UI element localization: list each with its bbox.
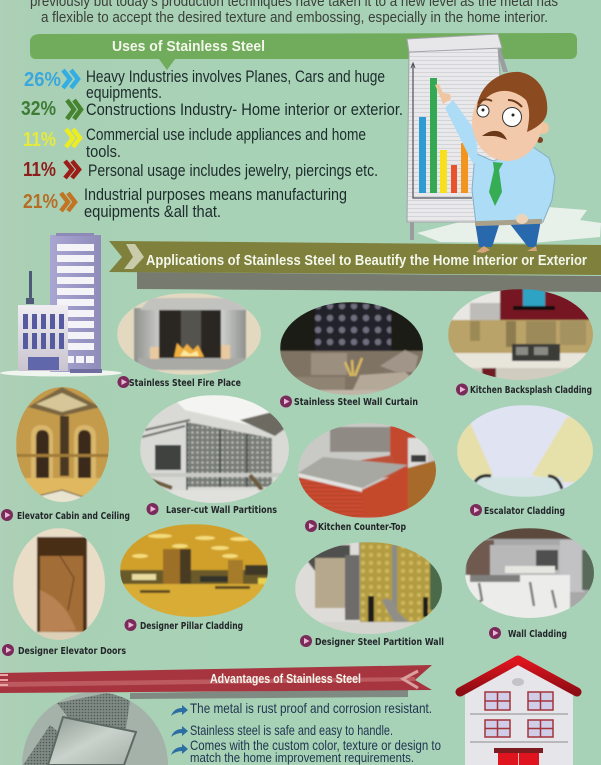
intro text: a flexible to accept the desired texture and embossing, especially in the home interior.: [41, 10, 548, 26]
use: heavy industries: [24, 68, 385, 102]
caption: fire place: [118, 376, 241, 389]
heading banner: uses of stainless steel: [30, 33, 577, 70]
caption: cabin: Elevator Cabin and Ceiling: [17, 511, 130, 522]
photo: elevator cabin: [16, 387, 110, 510]
use: commercial: [23, 126, 366, 161]
photo: kitchen counter-top: [298, 423, 437, 519]
caption: laser-cut: [146, 503, 277, 516]
use: industrial: Industrial purposes means manufacturing: [84, 186, 347, 204]
caption: fire place: Stainless Steel Fire Place: [129, 378, 241, 389]
advantages list: [171, 700, 441, 765]
caption: wall curtain: [280, 396, 418, 408]
use: heavy industries: Heavy Industries involves Planes, Cars and huge: [86, 68, 385, 86]
use: industrial: 21%: [23, 191, 58, 213]
photo: fire place: [117, 293, 262, 375]
use: commercial: 11%: [23, 129, 56, 151]
steel sheet image: [22, 688, 168, 765]
heading banner: uses of stainless steel: Uses of Stainless Steel: [112, 38, 265, 55]
presenter illustration: [407, 34, 555, 253]
use: industrial: equipments &all that.: [84, 203, 221, 221]
caption: wall cladding: [489, 627, 567, 640]
use: personal: Personal usage includes jewelry, piercings etc.: [88, 162, 378, 180]
caption: cabin: [1, 509, 130, 522]
photo: laser-cut wall partitions: [140, 395, 290, 504]
use: construction: 32%: [21, 98, 56, 120]
intro text: [30, 0, 558, 26]
heading banner: advantages: Advantages of Stainless Steel: [210, 671, 361, 686]
caption: escalator: [470, 504, 565, 517]
bar chart: [419, 78, 468, 193]
cartoon man: [435, 72, 555, 253]
photo: escalator: [457, 405, 594, 497]
caption: wall curtain: Stainless Steel Wall Curtain: [294, 397, 418, 408]
caption: pillar: Designer Pillar Cladding: [140, 621, 243, 632]
use: personal: [23, 159, 378, 181]
caption: escalator: Escalator Cladding: [484, 506, 565, 517]
use: industrial: [23, 186, 347, 221]
advantage: custom: [171, 737, 441, 765]
use: commercial: Commercial use include appliances and home: [86, 126, 366, 144]
building illustration: [0, 233, 122, 376]
white floor shadow: [417, 207, 601, 243]
photo: partition wall: [295, 542, 443, 635]
photo captions: [1, 376, 592, 657]
advantage: safe: Stainless steel is safe and easy to handle.: [190, 722, 393, 738]
photo: wall curtain: [280, 302, 424, 396]
advantage: rust proof: The metal is rust proof and corrosion resistant.: [190, 700, 432, 716]
photo: kitchen backsplash: [448, 289, 594, 381]
heading banner: applications: [109, 241, 601, 292]
caption: elevator doors: Designer Elevator Doors: [18, 646, 126, 657]
photo: wall cladding: [465, 528, 596, 619]
use: heavy industries: equipments.: [86, 84, 162, 102]
flip chart: [407, 34, 510, 242]
caption: wall cladding: Wall Cladding: [508, 629, 567, 640]
photo: pillar cladding: [120, 524, 268, 618]
house illustration: [460, 660, 577, 765]
caption: partition: [300, 635, 444, 648]
caption: laser-cut: Laser-cut Wall Partitions: [166, 505, 277, 516]
caption: pillar: [124, 619, 243, 632]
caption: counter-top: Kitchen Counter-Top: [318, 522, 406, 533]
use: construction: Constructions Industry- Home interior or exterior.: [86, 101, 403, 119]
photo: elevator doors: [13, 528, 106, 641]
caption: partition: Designer Steel Partition Wall: [315, 637, 444, 648]
advantage: custom: Comes with the custom color, texture or design to: [190, 737, 441, 753]
use: heavy industries: 26%: [24, 69, 61, 91]
heading banner: advantages: [0, 665, 432, 699]
advantage: custom: match the home improvement requirements.: [190, 750, 414, 765]
use: construction: [21, 98, 403, 120]
uses list: [21, 68, 403, 221]
caption: elevator doors: [2, 644, 126, 657]
caption: counter-top: [305, 520, 406, 533]
photo gallery: [13, 289, 596, 641]
use: commercial: tools.: [86, 143, 121, 161]
use: personal: 11%: [23, 159, 56, 181]
